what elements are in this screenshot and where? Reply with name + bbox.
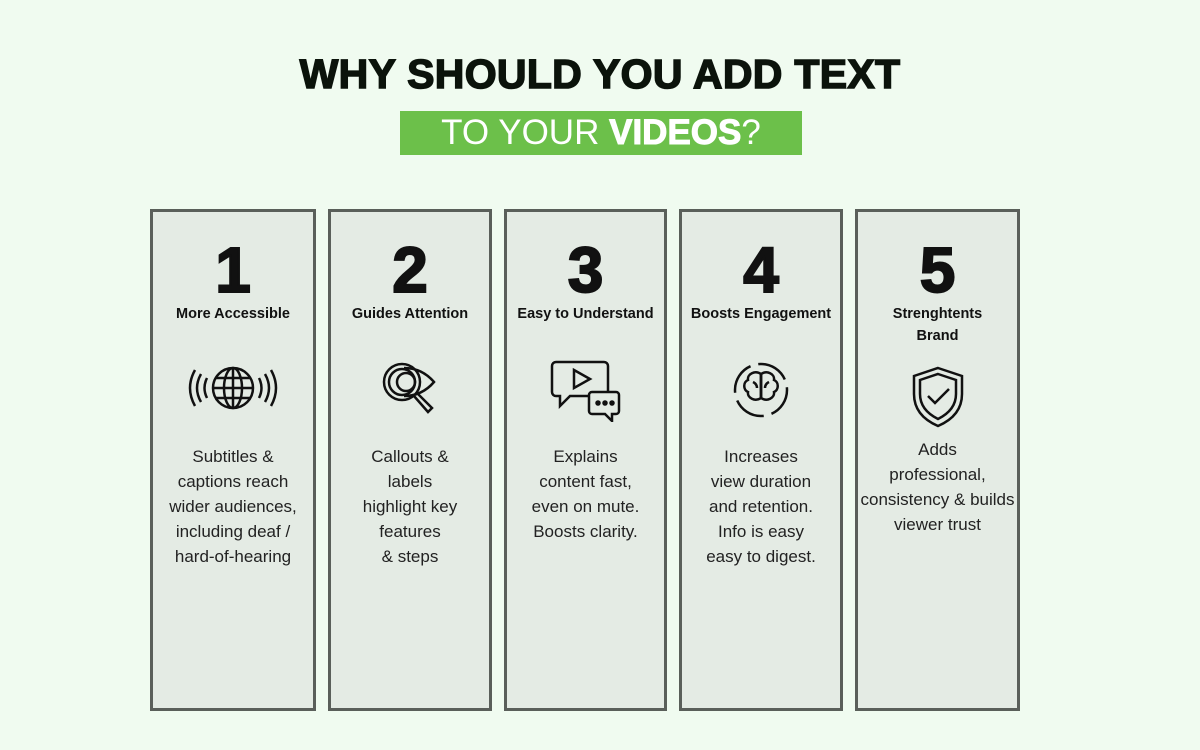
text: features [379,522,441,541]
number 1: 1 [215,234,251,306]
text: captions reach [178,472,288,491]
text: wider audiences, [169,497,297,516]
panel: card 4 [679,209,843,711]
panel: card 3 [504,209,667,711]
text: content fast, [539,472,632,491]
label [893,306,982,344]
text [532,447,639,541]
subtitle banner: TO YOUR VIDEOS? [441,113,761,152]
label: Easy to Understand [517,306,654,322]
label: Guides Attention [352,306,468,322]
icon: brain cycle [734,362,788,418]
text: view duration [711,472,811,491]
text: viewer trust [894,515,981,534]
text: highlight key [363,497,457,516]
label: Brand [917,328,958,344]
text: Info is easy [718,522,804,541]
text: Boosts clarity. [533,522,638,541]
label: Boosts Engagement [691,306,831,322]
panel: card 1 [150,209,316,711]
icon: chat video [550,360,620,422]
label: Strenghtents [893,306,982,322]
text: Explains [553,447,618,466]
text: labels [388,472,432,491]
icon: shield check [912,366,964,428]
text [706,447,816,566]
icon: globe with waves [188,366,278,410]
text: Adds [918,440,957,459]
number 2: 2 [392,234,428,306]
number 4: 4 [743,234,779,306]
number 3: 3 [568,234,603,306]
text: consistency & builds [860,490,1015,509]
panel: card 5 [855,209,1020,711]
icon: magnifier eye [382,362,436,414]
text: hard-of-hearing [175,547,291,566]
text: Callouts & [371,447,449,466]
label: More Accessible [176,306,290,322]
text: professional, [889,465,986,484]
text: even on mute. [532,497,639,516]
text [169,447,297,566]
text: easy to digest. [706,547,816,566]
title: WHY SHOULD YOU ADD TEXT [300,51,900,97]
text [363,447,458,566]
text: Subtitles & [192,447,274,466]
text [860,440,1015,534]
number 5: 5 [920,234,955,306]
text: Increases [724,447,798,466]
text: & steps [382,547,438,566]
panel: card 2 [328,209,492,711]
text: including deaf / [176,522,290,541]
text: and retention. [709,497,813,516]
